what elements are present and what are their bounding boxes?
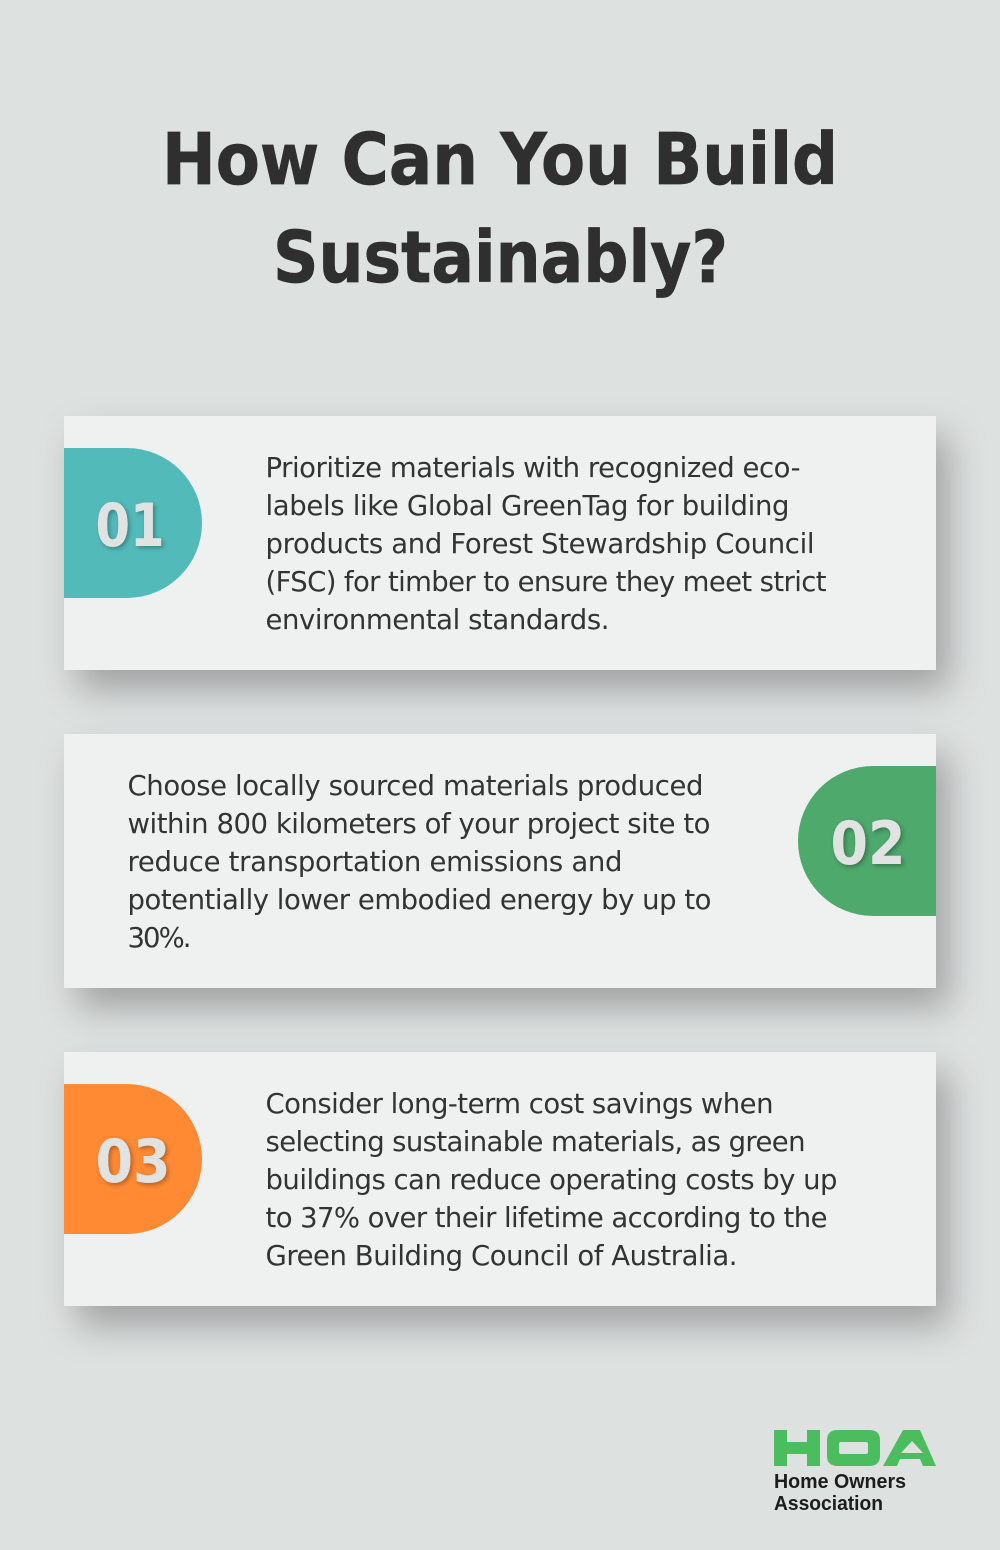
badge 02 (798, 766, 936, 916)
title (162, 118, 838, 299)
text block 2: potentially lower embodied energy by up to (128, 884, 712, 916)
badge 01: 01 (96, 491, 164, 561)
badge 02: 02 (830, 809, 906, 879)
text block 1: environmental standards. (266, 604, 610, 636)
text block 1 (266, 452, 827, 636)
text block 2: reduce transportation emissions and (128, 846, 622, 878)
text block 3: Green Building Council of Australia. (266, 1240, 738, 1272)
text block 3: selecting sustainable materials, as green (266, 1126, 806, 1158)
card background 2 (64, 734, 936, 988)
badge 03: 03 (96, 1127, 170, 1197)
text block 3: buildings can reduce operating costs by up (266, 1164, 838, 1196)
text block 1: Prioritize materials with recognized eco- (266, 452, 800, 484)
card background 1 (64, 416, 936, 670)
text block 1: (FSC) for timber to ensure they meet strict (266, 566, 827, 598)
panel: eco-labels (64, 416, 936, 670)
panel: long-term savings (64, 1052, 936, 1306)
text block 2 (128, 770, 712, 954)
card background 3 (64, 1052, 936, 1306)
text block 2: 30%. (128, 922, 192, 954)
badge 01 (64, 448, 202, 598)
panel: local materials (64, 734, 936, 988)
text block 2: Choose locally sourced materials produced (128, 770, 704, 802)
text block 3 (266, 1088, 838, 1272)
icon: HOA letters (774, 1430, 936, 1466)
text block 1: labels like Global GreenTag for building (266, 490, 790, 522)
title: How Can You Build (162, 118, 838, 201)
title: Sustainably? (273, 216, 728, 299)
text block 1: products and Forest Stewardship Council (266, 528, 814, 560)
text block 3: Consider long-term cost savings when (266, 1088, 774, 1120)
text block 3: to 37% over their lifetime according to the (266, 1202, 828, 1234)
text block 2: within 800 kilometers of your project site to (128, 808, 710, 840)
badge 03 (64, 1084, 202, 1234)
logo: HOA: Home Owners (774, 1471, 906, 1493)
logo: HOA: Association (774, 1493, 883, 1515)
logo: HOA (774, 1430, 936, 1515)
